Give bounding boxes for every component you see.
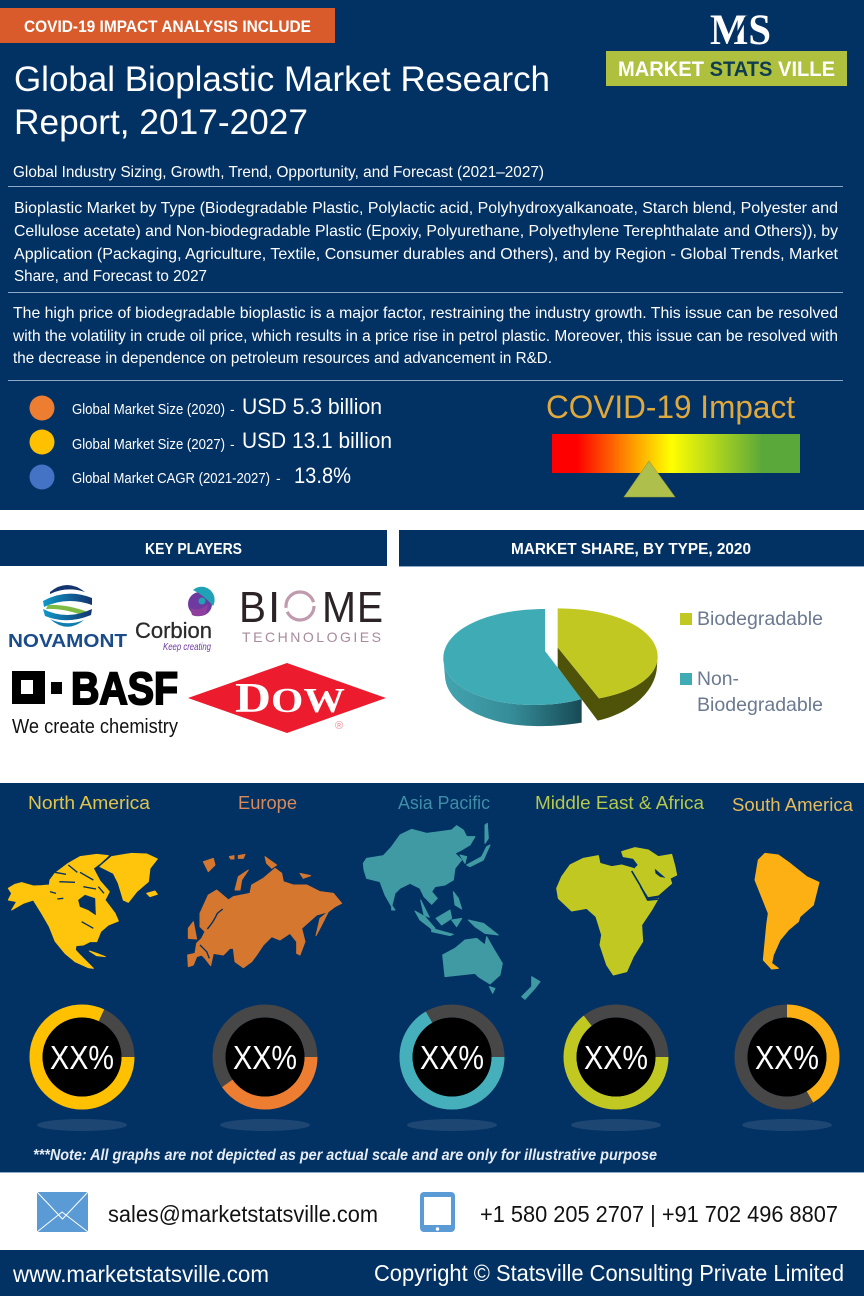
donut: South America: XX%: [755, 1039, 819, 1076]
logo: Biome Technologies: [239, 583, 383, 645]
legend: non-biodegradable: [680, 668, 823, 716]
panel: header section: [0, 0, 864, 510]
logo: Corbion: [135, 587, 215, 653]
donut: South America: [741, 1011, 833, 1131]
logo: Biome Technologies: B: [239, 583, 266, 632]
text block: restraints: [12, 305, 838, 367]
chart: market share 3D pie: [443, 608, 658, 726]
note: ***Note: All graphs are not depicted as per actual scale and are only for illustrative purpose: [33, 1147, 657, 1164]
chart legend: [680, 608, 823, 716]
region labels: Europe: [238, 792, 297, 813]
legend: biodegradable: Biodegradable: [697, 608, 823, 630]
logo: BASF: BASF: [71, 663, 178, 714]
text block: market description: Cellulose acetate) and Non-biodegradable Plastic (Epoxiy, Polyurethane, Polyethylene Terephthalate and Others)), by: [14, 223, 838, 240]
title: Report, 2017-2027: [14, 103, 308, 142]
logo: Novamont: NOVAMONT: [8, 631, 127, 651]
stat: market size 2020: Global Market Size (2020): [72, 402, 225, 418]
stat: market size 2020: [30, 394, 382, 420]
heading: key players: KEY PLAYERS: [145, 541, 242, 558]
stat: market size 2020: -: [230, 401, 235, 417]
logo: Novamont: [8, 585, 127, 651]
subtitle: Global Industry Sizing, Growth, Trend, Opportunity, and Forecast (2021–2027): [13, 164, 544, 181]
covid-19 impact gauge: COVID-19 Impact: [546, 389, 795, 425]
map: Asia Pacific: [363, 823, 540, 999]
logo: Market Stats Ville: MARKET STATS VILLE: [618, 58, 835, 81]
stat: market size 2020: USD 5.3 billion: [242, 394, 382, 419]
logo: Biome Technologies: M: [322, 583, 356, 632]
logo: Market Stats Ville: MS: [710, 7, 771, 54]
heading: market share: [399, 530, 864, 567]
logo: Biome Technologies: I: [268, 583, 280, 632]
donut: Asia Pacific: XX%: [420, 1039, 484, 1076]
heading: market share: MARKET SHARE, BY TYPE, 2020: [511, 541, 751, 558]
title: Global Bioplastic Market Research: [14, 60, 550, 99]
text block: restraints: The high price of biodegradable bioplastic is a major factor, restraining the industry growth. This issue can be resolved: [13, 305, 838, 322]
stat: CAGR: [30, 463, 351, 490]
logo: Dow: DOW: [235, 676, 345, 722]
donut: Middle East and Africa: XX%: [584, 1039, 648, 1076]
map: South America: [755, 853, 819, 969]
logo: Market Stats Ville: [606, 7, 847, 86]
heading: key players: [0, 530, 387, 566]
badge: covid-19 analysis: [0, 8, 335, 43]
icon: phone: [420, 1192, 455, 1232]
icon: envelope: [37, 1192, 88, 1232]
text block: market description: [14, 200, 839, 285]
logo: BASF: We create chemistry: [12, 716, 178, 738]
stat: market size 2027: USD 13.1 billion: [242, 428, 392, 453]
badge: covid-19 analysis: COVID-19 IMPACT ANALYSIS INCLUDE: [24, 18, 311, 36]
covid-19 impact gauge: [546, 389, 800, 497]
copyright: Copyright © Statsville Consulting Private Limited: [374, 1260, 844, 1286]
region labels: Middle East & Africa: [535, 792, 705, 813]
text block: restraints: the decrease in dependence on petroleum resources and advancement in R&D.: [13, 350, 552, 367]
text block: market description: Application (Packaging, Agriculture, Textile, Consumer durables and Others), and by Region - Global Trends, Market: [14, 246, 839, 263]
region labels: [28, 792, 854, 815]
stat: market size 2027: [30, 428, 392, 454]
logo: Biome Technologies: TECHNOLOGIES: [242, 629, 381, 645]
map: North America: [8, 853, 157, 968]
legend: non-biodegradable: Biodegradable: [697, 694, 823, 716]
region labels: Asia Pacific: [398, 792, 490, 813]
logo: Biome Technologies: E: [357, 583, 383, 632]
map: Middle East and Africa: [557, 848, 677, 975]
donut: Asia Pacific: [406, 1011, 498, 1131]
text block: market description: Share, and Forecast to 2027: [14, 268, 207, 285]
panel: key player logos: [8, 583, 386, 738]
stat: market size 2027: -: [230, 436, 235, 452]
legend: non-biodegradable: Non-: [697, 668, 739, 690]
stat: CAGR: 13.8%: [294, 463, 351, 488]
donut: Europe: [219, 1011, 311, 1131]
logo: Dow: ®: [335, 720, 343, 732]
key stats: [30, 394, 392, 490]
donut: Europe: XX%: [233, 1039, 297, 1076]
stat: market size 2027: Global Market Size (2027): [72, 437, 225, 453]
panel: footer: [0, 1250, 864, 1296]
donut: Middle East and Africa: [570, 1011, 662, 1131]
donut: North America: XX%: [50, 1039, 114, 1076]
pie slice: biodegradable: [558, 608, 658, 721]
region labels: North America: [28, 792, 151, 813]
map: Europe and Russia: [188, 854, 342, 968]
phone numbers: +1 580 205 2707 | +91 702 496 8807: [480, 1201, 838, 1227]
pie slice: non-biodegradable: [443, 609, 582, 726]
panel: contact strip: [0, 1173, 864, 1250]
logo: Corbion: Corbion: [135, 618, 212, 643]
logo: Dow: [188, 663, 386, 733]
text block: market description: Bioplastic Market by Type (Biodegradable Plastic, Polylactic acid, Polyhydroxyalkanoate, Starch blend, Polyester and: [14, 200, 838, 217]
logo: BASF: [12, 663, 178, 738]
website: www.marketstatsville.com: [12, 1261, 269, 1287]
donut: North America: [36, 1011, 128, 1131]
text block: restraints: with the volatility in crude oil price, which results in a price rise in petrol plastic. Moreover, this issue can be resolved with: [12, 328, 838, 345]
email: sales@marketstatsville.com: [108, 1201, 378, 1227]
stat: CAGR: -: [276, 470, 281, 486]
logo: Corbion: Keep creating: [163, 641, 211, 653]
panel: regions: [0, 783, 864, 1173]
title: [14, 60, 550, 142]
region labels: South America: [732, 794, 854, 815]
stat: CAGR: Global Market CAGR (2021-2027): [72, 471, 270, 487]
